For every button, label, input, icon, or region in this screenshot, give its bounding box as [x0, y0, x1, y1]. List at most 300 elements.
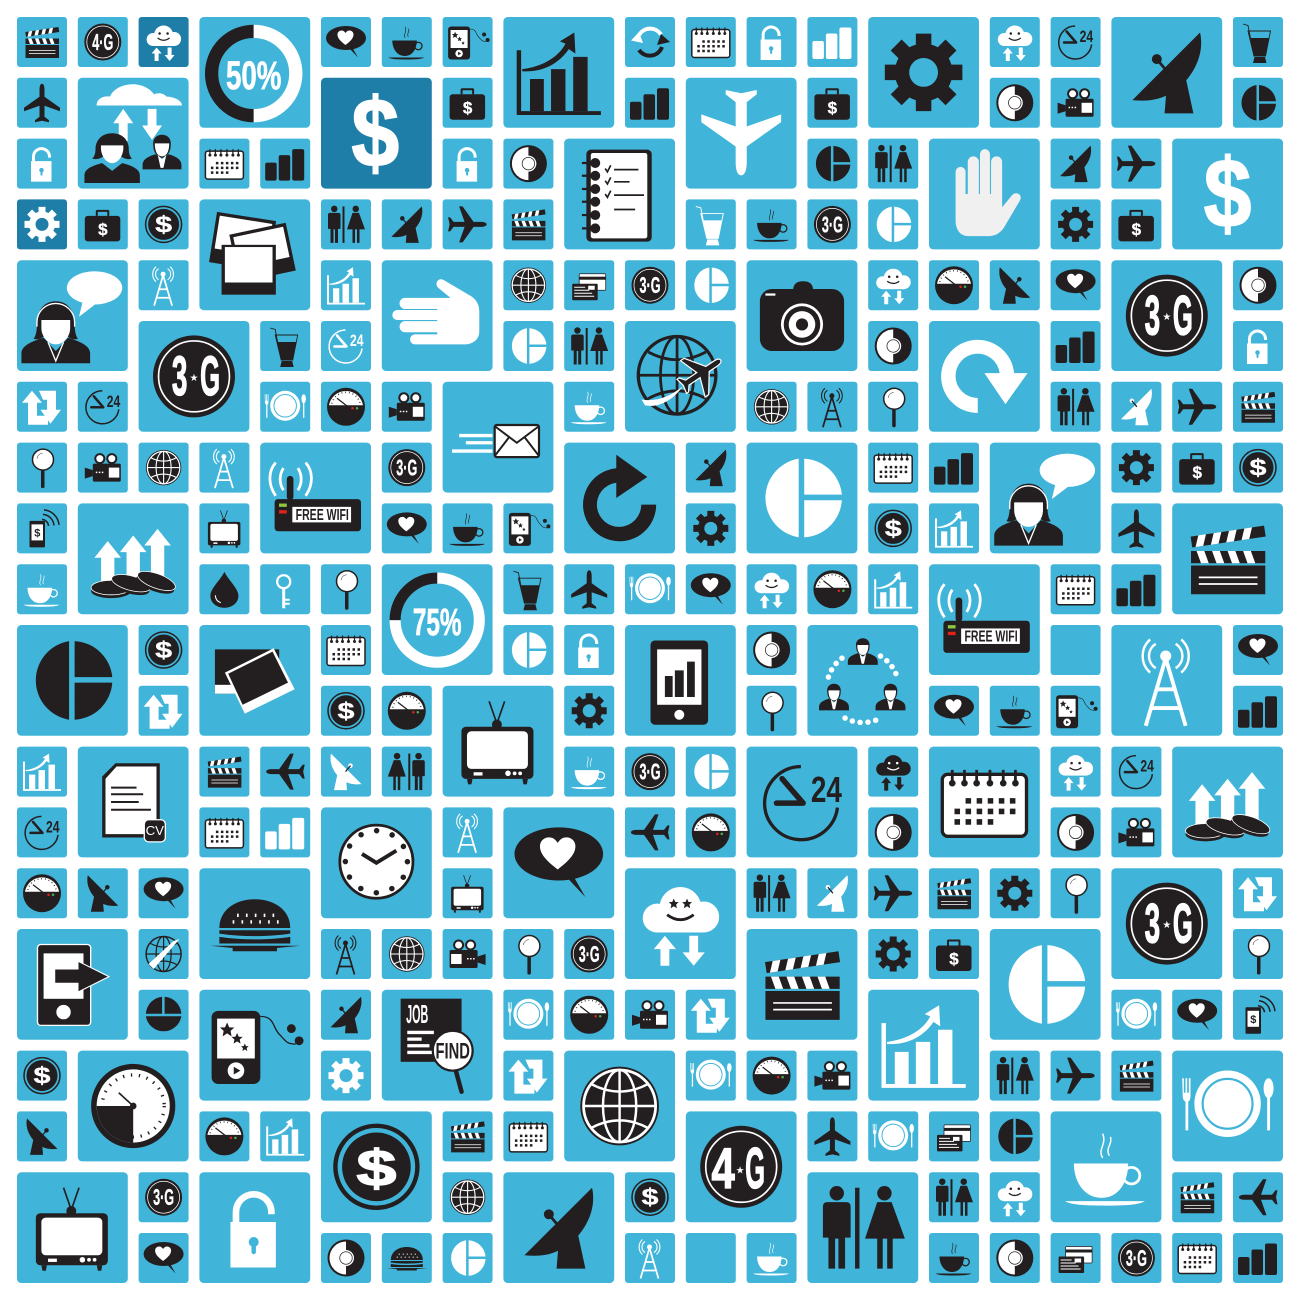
icon: drink	[503, 564, 553, 614]
icon: calendar	[1051, 564, 1101, 614]
icon: 3G badge	[564, 929, 614, 979]
icon: calendar	[199, 807, 249, 857]
icon: 3G badge	[807, 199, 857, 249]
panel: free wifi router	[260, 443, 371, 553]
panel: tablet with chart	[625, 625, 736, 736]
panel: free wifi router	[929, 564, 1040, 675]
panel: burger	[199, 868, 310, 979]
icon: growth chart	[868, 564, 918, 614]
icon: 3G badge	[1111, 1233, 1161, 1283]
icon: clapperboard	[1172, 1172, 1222, 1222]
icon: phone payment signal: $	[34, 527, 40, 539]
icon: restroom people	[564, 321, 614, 371]
icon: 3G badge: 3·G	[579, 941, 600, 967]
panel: black pie chart	[17, 625, 128, 736]
icon: cloud transfer	[747, 564, 797, 614]
icon: 24 hour clock: 24	[107, 393, 121, 411]
icon: pie chart	[443, 1233, 493, 1283]
panel: white coffee cup	[1051, 1111, 1161, 1222]
icon: coffee cup	[382, 17, 432, 67]
icon: restroom people	[990, 1051, 1040, 1101]
icon: restroom people	[868, 139, 918, 189]
icon: 3G badge: 3·G	[640, 272, 660, 298]
icon: open lock	[443, 139, 493, 189]
icon: gear on dark tile	[17, 199, 67, 249]
icon: radio tower	[625, 1233, 675, 1283]
panel: 3G badge: 3	[1145, 284, 1160, 346]
panel: call centre operator	[990, 443, 1101, 553]
icon: dollar briefcase: $	[1192, 463, 1202, 482]
icon: water drop	[199, 564, 249, 614]
panel: dollar on dark tile: $	[351, 78, 399, 187]
icon: open lock	[1233, 321, 1283, 371]
icon: pie chart	[503, 321, 553, 371]
icon: gear	[990, 868, 1040, 918]
icon: credit cards	[929, 1111, 979, 1161]
panel: dollar coin: $	[356, 1140, 396, 1197]
panel: heart bubble	[503, 807, 614, 918]
icon: radio tower	[321, 929, 371, 979]
icon: signal bars	[1111, 564, 1161, 614]
icon: restroom people	[929, 1172, 979, 1222]
icon: pie chart	[686, 260, 736, 310]
panel: television	[443, 686, 553, 797]
icon: 24 hour clock: 24	[1140, 758, 1155, 776]
icon: dark cloud transfer	[868, 747, 918, 797]
panel: 3G badge: G	[1173, 892, 1193, 954]
icon: signal bars	[1051, 321, 1101, 371]
icon: radio tower	[139, 260, 189, 310]
icon: 3G badge: 3·G	[1126, 1245, 1147, 1271]
icon: compact disc	[747, 625, 797, 675]
panel: pointing hand	[382, 260, 493, 371]
panel: globe	[564, 1051, 675, 1161]
panel: clapperboard	[747, 929, 857, 1040]
icon: signal bars	[807, 17, 857, 67]
panel: white pie chart	[747, 443, 857, 553]
icon: gauge	[807, 564, 857, 614]
icon: airplane	[260, 747, 310, 797]
icon: 24 hour clock	[1051, 17, 1101, 67]
icon: gauge	[747, 1051, 797, 1101]
icon: magnifier	[321, 564, 371, 614]
icon: key	[260, 564, 310, 614]
icon: radio tower	[807, 382, 857, 432]
icon: credit cards	[1051, 1233, 1101, 1283]
icon: gauge	[199, 1111, 249, 1161]
icon: burger	[382, 1233, 432, 1283]
icon: drink	[260, 321, 310, 371]
panel: 50% donut	[199, 17, 310, 128]
icon: compact disc	[868, 807, 918, 857]
icon: coffee cup	[443, 503, 493, 553]
panel: black redo arrow	[564, 443, 675, 553]
icon: signal bars	[1233, 1233, 1283, 1283]
icon: heart bubble	[139, 1233, 189, 1283]
icon: gauge	[564, 990, 614, 1040]
icon: clapperboard	[199, 747, 249, 797]
panel: television	[17, 1172, 128, 1283]
icon: globe	[747, 382, 797, 432]
icon: calendar	[868, 443, 918, 493]
icon: compact disc	[1051, 807, 1101, 857]
icon: restroom people	[747, 868, 797, 918]
icon: gauge	[17, 868, 67, 918]
icon: dollar briefcase	[78, 199, 128, 249]
icon: recycle arrows	[686, 990, 736, 1040]
icon: plate and cutlery	[686, 1051, 736, 1101]
icon: drink	[1233, 17, 1283, 67]
icon: satellite dish	[686, 443, 736, 493]
icon: movie camera	[382, 382, 432, 432]
icon: gear	[321, 1051, 371, 1101]
icon: gauge	[686, 807, 736, 857]
icon: calendar	[321, 625, 371, 675]
icon: 3G badge	[139, 1172, 189, 1222]
icon: globe	[139, 443, 189, 493]
icon: satellite dish	[17, 1111, 67, 1161]
icon: globe	[503, 260, 553, 310]
panel: globe with airplane	[625, 321, 736, 432]
panel: restroom people	[807, 1172, 918, 1283]
panel: CV document	[78, 747, 189, 857]
icon: dollar coin: $	[338, 698, 355, 724]
icon: dollar briefcase	[1111, 199, 1161, 249]
icon: radio tower	[199, 443, 249, 493]
icon: cloud transfer on dark tile	[139, 17, 189, 67]
icon: heart bubble	[321, 17, 371, 67]
icon: heart bubble	[929, 686, 979, 736]
icon: clapperboard	[503, 199, 553, 249]
icon: gear	[1111, 443, 1161, 493]
panel: dollar: $	[1204, 139, 1251, 248]
icon: recycle arrows	[139, 686, 189, 736]
icon: phone payment signal	[17, 503, 67, 553]
panel: people sharing via cloud	[78, 78, 189, 189]
icon: dollar coin: $	[155, 211, 172, 237]
icon: music player	[503, 503, 553, 553]
icon: satellite dish	[990, 260, 1040, 310]
icon: dollar coin	[17, 1051, 67, 1101]
icon: airplane	[1233, 1172, 1283, 1222]
panel: satellite dish	[503, 1172, 614, 1283]
icon: movie camera	[443, 929, 493, 979]
icon: drink	[686, 199, 736, 249]
icon: gauge	[321, 382, 371, 432]
panel: 24 hour clock: 24	[811, 769, 842, 810]
icon: television	[443, 868, 493, 918]
icon: 24 hour clock: 24	[350, 332, 364, 350]
panel: wall clock	[321, 807, 432, 918]
icon: magnifier	[1233, 929, 1283, 979]
panel: cloud with star eyes	[625, 868, 736, 979]
icon: pie chart	[990, 1111, 1040, 1161]
icon: airplane	[1051, 1051, 1101, 1101]
icon: compact disc	[503, 139, 553, 189]
icon: dollar coin	[139, 199, 189, 249]
icon: coffee cup	[564, 382, 614, 432]
panel: satellite dish	[1111, 17, 1222, 128]
panel: 24 hour clock	[747, 747, 857, 857]
icon: coffee cup	[747, 1233, 797, 1283]
icon: pie chart	[1233, 78, 1283, 128]
panel: dollar coin	[321, 1111, 432, 1222]
panel: dollar	[1172, 139, 1283, 249]
icon: plate and cutlery	[503, 990, 553, 1040]
icon: dollar briefcase	[443, 78, 493, 128]
icon: airplane	[443, 199, 493, 249]
icon: magnifier	[1051, 868, 1101, 918]
icon: compact disc	[990, 1233, 1040, 1283]
icon: cloud transfer	[868, 260, 918, 310]
panel: photo stack	[199, 199, 310, 310]
panel: two photos	[199, 625, 310, 736]
panel: 3G badge	[1111, 260, 1222, 371]
icon: heart bubble	[1051, 260, 1101, 310]
icon: calendar	[1172, 1233, 1222, 1283]
panel: 4G badge	[686, 1111, 797, 1222]
icon: dollar briefcase	[929, 929, 979, 979]
panel: 3G badge: ★	[190, 373, 199, 384]
icon: gear	[564, 686, 614, 736]
panel: fast mail	[443, 382, 553, 493]
icon: coffee cup	[990, 686, 1040, 736]
icon: dollar coin	[1233, 443, 1283, 493]
icon: gear	[868, 929, 918, 979]
icon: globe	[382, 929, 432, 979]
panel: white redo arrow	[929, 321, 1040, 432]
icon: phone payment signal	[1233, 990, 1283, 1040]
icon: dollar coin: $	[885, 515, 902, 541]
panel: 3G badge	[1111, 868, 1222, 979]
panel: 3G badge: ★	[1162, 312, 1171, 323]
panel: people network	[807, 625, 918, 736]
panel: white open lock	[199, 1172, 310, 1283]
icon: dollar coin	[139, 625, 189, 675]
icon: airplane	[868, 868, 918, 918]
panel: speedometer	[78, 1051, 189, 1161]
icon: pie chart	[807, 139, 857, 189]
panel: call centre operator	[17, 260, 128, 371]
icon: gear	[1051, 199, 1101, 249]
icon: pie chart	[139, 990, 189, 1040]
icon: clapperboard	[929, 868, 979, 918]
icon: magnifier	[747, 686, 797, 736]
icon: 3G badge	[382, 443, 432, 493]
icon: compact disc	[990, 78, 1040, 128]
icon: 4G badge	[78, 17, 128, 67]
icon: dollar briefcase	[807, 78, 857, 128]
icon: dollar briefcase: $	[949, 950, 959, 968]
icon: pie chart	[868, 199, 918, 249]
icon: dollar coin	[868, 503, 918, 553]
icon: 24 hour clock	[78, 382, 128, 432]
icon: 3G badge: 3·G	[640, 759, 660, 785]
icon: clapperboard	[443, 1111, 493, 1161]
icon: satellite dish	[382, 199, 432, 249]
icon: plate and cutlery	[625, 564, 675, 614]
icon: restroom people	[1051, 382, 1101, 432]
panel: 3G badge	[139, 321, 249, 432]
panel: radio tower	[1111, 625, 1222, 736]
icon: heart bubble	[1172, 990, 1222, 1040]
icon: growth chart	[929, 503, 979, 553]
panel: job search	[382, 990, 493, 1101]
panel: clapperboard	[1172, 503, 1283, 614]
icon: dollar briefcase: $	[1132, 220, 1142, 239]
icon: airplane	[625, 807, 675, 857]
icon: plate and cutlery	[1111, 990, 1161, 1040]
panel: dollar on dark tile	[321, 78, 432, 189]
icon: magnifier	[868, 382, 918, 432]
panel: white airplane	[686, 78, 797, 189]
icon: movie camera	[1111, 807, 1161, 857]
icon: dollar coin	[321, 686, 371, 736]
panel: 3G badge: ★	[1162, 920, 1171, 931]
icon: growth chart	[260, 1111, 310, 1161]
icon: heart bubble	[382, 503, 432, 553]
icon: 3G badge: 3·G	[153, 1184, 174, 1210]
icon: television	[199, 503, 249, 553]
icon: cloud transfer	[990, 1172, 1040, 1222]
icon: recycle arrows	[17, 382, 67, 432]
icon: open lock	[564, 625, 614, 675]
panel: 4G badge: ★	[736, 1165, 745, 1176]
icon: gear	[686, 503, 736, 553]
panel: 75% donut	[382, 564, 493, 675]
icon: 3G badge: 3·G	[396, 455, 417, 481]
icon: credit cards	[564, 260, 614, 310]
icon: open lock	[17, 139, 67, 189]
icon: signal bars	[625, 78, 675, 128]
panel: music player	[199, 990, 310, 1101]
panel: 3G badge: 3	[1145, 892, 1160, 954]
icon: movie camera	[807, 1051, 857, 1101]
icon: 24 hour clock	[1111, 747, 1161, 797]
icon: 24 hour clock	[321, 321, 371, 371]
icon: compact disc	[1233, 260, 1283, 310]
icon: open lock	[747, 17, 797, 67]
panel: CV document: CV	[146, 823, 164, 838]
icon: phone payment signal: $	[1250, 1014, 1256, 1026]
icon: clapperboard	[17, 17, 67, 67]
panel: 75% donut: 75%	[413, 601, 462, 643]
icon: movie camera	[1051, 78, 1101, 128]
panel: 3G badge: 3	[172, 345, 187, 407]
icon: 3G badge	[625, 260, 675, 310]
icon: restroom people	[321, 199, 371, 249]
icon: compact disc	[321, 1233, 371, 1283]
icon: dollar briefcase: $	[463, 98, 473, 117]
icon: dollar briefcase: $	[828, 98, 838, 117]
icon: plate and cutlery	[868, 1111, 918, 1161]
icon: pie chart	[686, 747, 736, 797]
panel: growth chart	[503, 17, 614, 128]
icon: airplane	[564, 564, 614, 614]
icon: airplane	[1172, 382, 1222, 432]
panel: 3G badge: G	[200, 345, 220, 407]
panel: white pie chart	[990, 929, 1101, 1040]
icon: radio tower	[443, 807, 493, 857]
icon: airplane	[1111, 139, 1161, 189]
icon: globe	[443, 1172, 493, 1222]
panel: white growth chart	[868, 990, 979, 1101]
icon: dollar coin: $	[155, 637, 172, 663]
icon: cloud transfer	[990, 17, 1040, 67]
icon: magnifier	[503, 929, 553, 979]
icon: recycle arrows	[1233, 868, 1283, 918]
panel: coins with rising arrows	[78, 503, 189, 614]
icon: airplane	[1111, 503, 1161, 553]
icon: restroom people	[382, 747, 432, 797]
panel: free wifi router: FREE WIFI	[964, 629, 1018, 646]
panel: coins with rising arrows	[1172, 747, 1283, 857]
icon: refresh arrows	[625, 17, 675, 67]
icon: calendar	[503, 1111, 553, 1161]
icon: clapperboard	[1111, 1051, 1161, 1101]
icon: heart bubble	[1233, 625, 1283, 675]
panel: gear	[868, 17, 979, 128]
icon: heart bubble	[139, 868, 189, 918]
icon: dollar coin: $	[1250, 455, 1267, 481]
panel: job search: FIND	[436, 1038, 470, 1063]
panel: 50% donut: 50%	[226, 54, 281, 98]
icon: coffee cup	[17, 564, 67, 614]
icon: satellite dish	[1051, 139, 1101, 189]
icon: music player	[443, 17, 493, 67]
icon: 24 hour clock: 24	[1080, 28, 1094, 46]
icon: satellite dish	[78, 868, 128, 918]
icon: dollar coin: $	[642, 1184, 659, 1210]
icon: coffee cup	[564, 747, 614, 797]
icon: airplane	[807, 1111, 857, 1161]
icon: satellite dish	[321, 747, 371, 797]
icon: 3G badge: 3·G	[822, 211, 843, 237]
icon: coffee cup	[747, 199, 797, 249]
icon: pie chart	[503, 625, 553, 675]
icon: calendar	[199, 139, 249, 189]
icon: recycle arrows	[503, 1051, 553, 1101]
icon: globe with white swoosh	[139, 929, 189, 979]
panel: calendar	[929, 747, 1040, 857]
icon: cloud transfer	[1051, 747, 1101, 797]
icon: music player	[1051, 686, 1101, 736]
icon: dollar briefcase: $	[98, 220, 108, 239]
panel: 4G badge: G	[745, 1137, 765, 1201]
icon: 24 hour clock	[17, 807, 67, 857]
icon: gauge	[382, 686, 432, 736]
panel: 4G badge: 4	[712, 1137, 735, 1201]
panel: photo camera	[747, 260, 857, 371]
icon: movie camera	[625, 990, 675, 1040]
icon: satellite dish	[321, 990, 371, 1040]
panel: plate and cutlery	[1172, 1051, 1283, 1161]
icon: compact disc	[868, 321, 918, 371]
icon: airplane	[17, 78, 67, 128]
panel: checklist notebook	[564, 139, 675, 249]
icon: signal bars	[260, 139, 310, 189]
icon: satellite dish	[1111, 382, 1161, 432]
panel: job search: JOB	[406, 1001, 428, 1029]
panel: raised hand	[929, 139, 1040, 249]
icon: plate and cutlery	[260, 382, 310, 432]
icon: clapperboard	[1233, 382, 1283, 432]
icon: movie camera	[78, 443, 128, 493]
icon: signal bars	[260, 807, 310, 857]
panel: empty tile	[1051, 625, 1101, 675]
panel: phone with arrow	[17, 929, 128, 1040]
icon: signal bars	[1233, 686, 1283, 736]
